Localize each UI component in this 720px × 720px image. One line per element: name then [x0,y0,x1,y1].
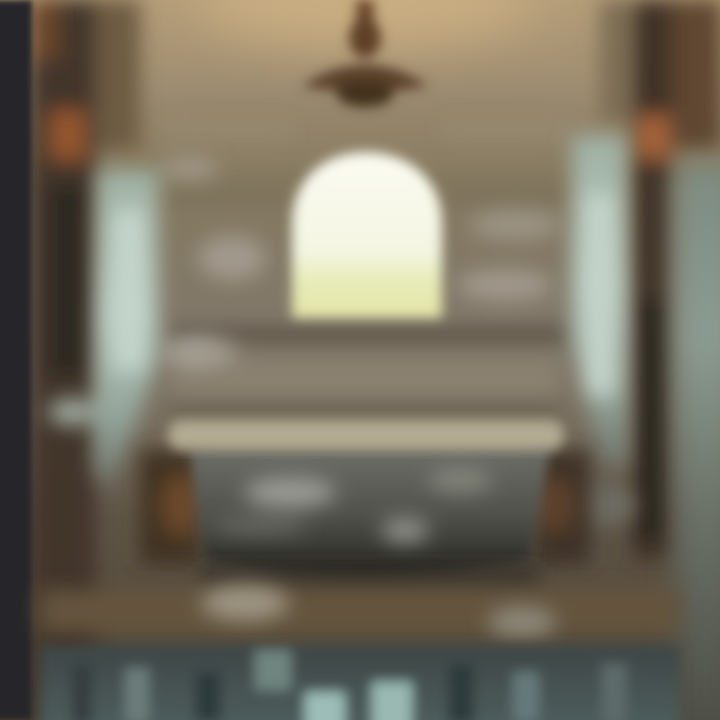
right pillar [600,0,720,560]
wooden floor strip [40,568,680,632]
right curtain [572,135,635,525]
wall stone bands [162,125,570,412]
left pillar and curtain dark backing [30,0,140,720]
ceiling lamp [302,0,428,107]
bathtub body [190,445,550,576]
far right glass panel [676,165,720,720]
tub left feet and side shadow [140,450,590,565]
ceiling glow [150,0,580,125]
far left dark column [0,0,32,720]
tiled floor [40,645,680,720]
bathtub rim [168,420,564,450]
left curtain [48,156,219,490]
tub highlights [212,468,492,543]
bath mats [201,585,556,638]
window [292,152,442,318]
